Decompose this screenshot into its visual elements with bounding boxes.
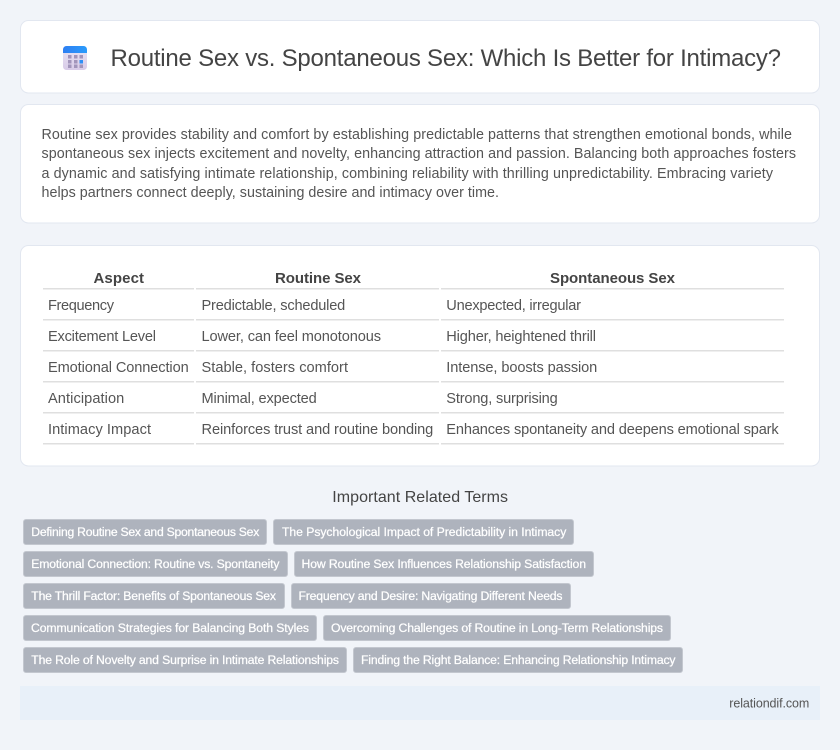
table header row: Aspect	[94, 270, 144, 287]
tag: The Role of Novelty and Surprise in Intimate Relationships	[31, 653, 339, 667]
tag: The Psychological Impact of Predictability in Intimacy	[282, 525, 567, 539]
tag	[24, 616, 316, 640]
row: anticipation	[43, 391, 784, 414]
description text	[42, 127, 796, 201]
tag	[24, 520, 266, 544]
row: frequency: Predictable, scheduled	[202, 298, 345, 314]
row: emotional connection: Stable, fosters comfort	[202, 360, 348, 376]
panel: comparison table	[20, 246, 820, 466]
heading: important related terms: Important Related Terms	[332, 489, 508, 506]
row: emotional connection	[43, 360, 784, 382]
panel: description	[20, 104, 820, 223]
description text: spontaneous sex injects excitement and novelty, enhancing attraction and passion. Balancing both approaches fosters	[42, 146, 796, 162]
tag: The Thrill Factor: Benefits of Spontaneous Sex	[31, 589, 276, 603]
panel: related term tags	[24, 520, 682, 672]
tag: Overcoming Challenges of Routine in Long-Term Relationships	[331, 621, 663, 635]
table header row: Routine Sex	[275, 270, 362, 287]
tag	[24, 648, 346, 672]
tag	[24, 552, 288, 576]
tag	[294, 552, 594, 576]
tag	[274, 520, 574, 544]
tag	[324, 616, 670, 640]
description text: helps partners connect deeply, sustaining desire and intimacy over time.	[42, 185, 499, 201]
row: anticipation: Minimal, expected	[202, 391, 317, 407]
tag: Finding the Right Balance: Enhancing Relationship Intimacy	[361, 653, 676, 667]
tag: How Routine Sex Influences Relationship Satisfaction	[302, 557, 586, 571]
tag: Communication Strategies for Balancing Both Styles	[31, 621, 309, 635]
tag	[292, 584, 570, 608]
icon: calendar	[63, 46, 87, 70]
row: excitement level	[43, 329, 784, 352]
row: frequency: Unexpected, irregular	[446, 298, 581, 314]
row: excitement level: Excitement Level	[48, 329, 156, 345]
description text: a dynamic and satisfying intimate relationship, combining reliability with thrilling unpredictability. Embracing variety	[42, 166, 774, 182]
row: emotional connection: Emotional Connection	[48, 360, 189, 376]
table header row	[43, 270, 784, 290]
footer source text: relationdif.com	[729, 696, 809, 710]
tag: Emotional Connection: Routine vs. Spontaneity	[31, 557, 280, 571]
footer bar	[20, 686, 820, 720]
row: anticipation: Anticipation	[48, 391, 124, 407]
row: emotional connection: Intense, boosts passion	[446, 360, 597, 376]
row: excitement level: Higher, heightened thrill	[446, 329, 596, 345]
row: intimacy impact: Reinforces trust and routine bonding	[202, 422, 433, 438]
row: anticipation: Strong, surprising	[446, 391, 558, 407]
tag	[354, 648, 682, 672]
tag: Defining Routine Sex and Spontaneous Sex	[31, 525, 259, 539]
description text: Routine sex provides stability and comfort by establishing predictable patterns that strengthen emotional bonds, while	[42, 127, 792, 143]
panel: title header	[20, 20, 820, 93]
table header row: Spontaneous Sex	[550, 270, 676, 287]
tag	[24, 584, 284, 608]
row: frequency	[43, 298, 784, 320]
row: intimacy impact: Intimacy Impact	[48, 422, 151, 438]
tag: Frequency and Desire: Navigating Different Needs	[298, 589, 562, 603]
title: Routine Sex vs. Spontaneous Sex: Which Is Better for Intimacy?	[110, 45, 781, 72]
row: frequency: Frequency	[48, 298, 115, 314]
row: intimacy impact: Enhances spontaneity and deepens emotional spark	[446, 422, 779, 438]
row: intimacy impact	[43, 422, 784, 444]
row: excitement level: Lower, can feel monotonous	[202, 329, 381, 345]
